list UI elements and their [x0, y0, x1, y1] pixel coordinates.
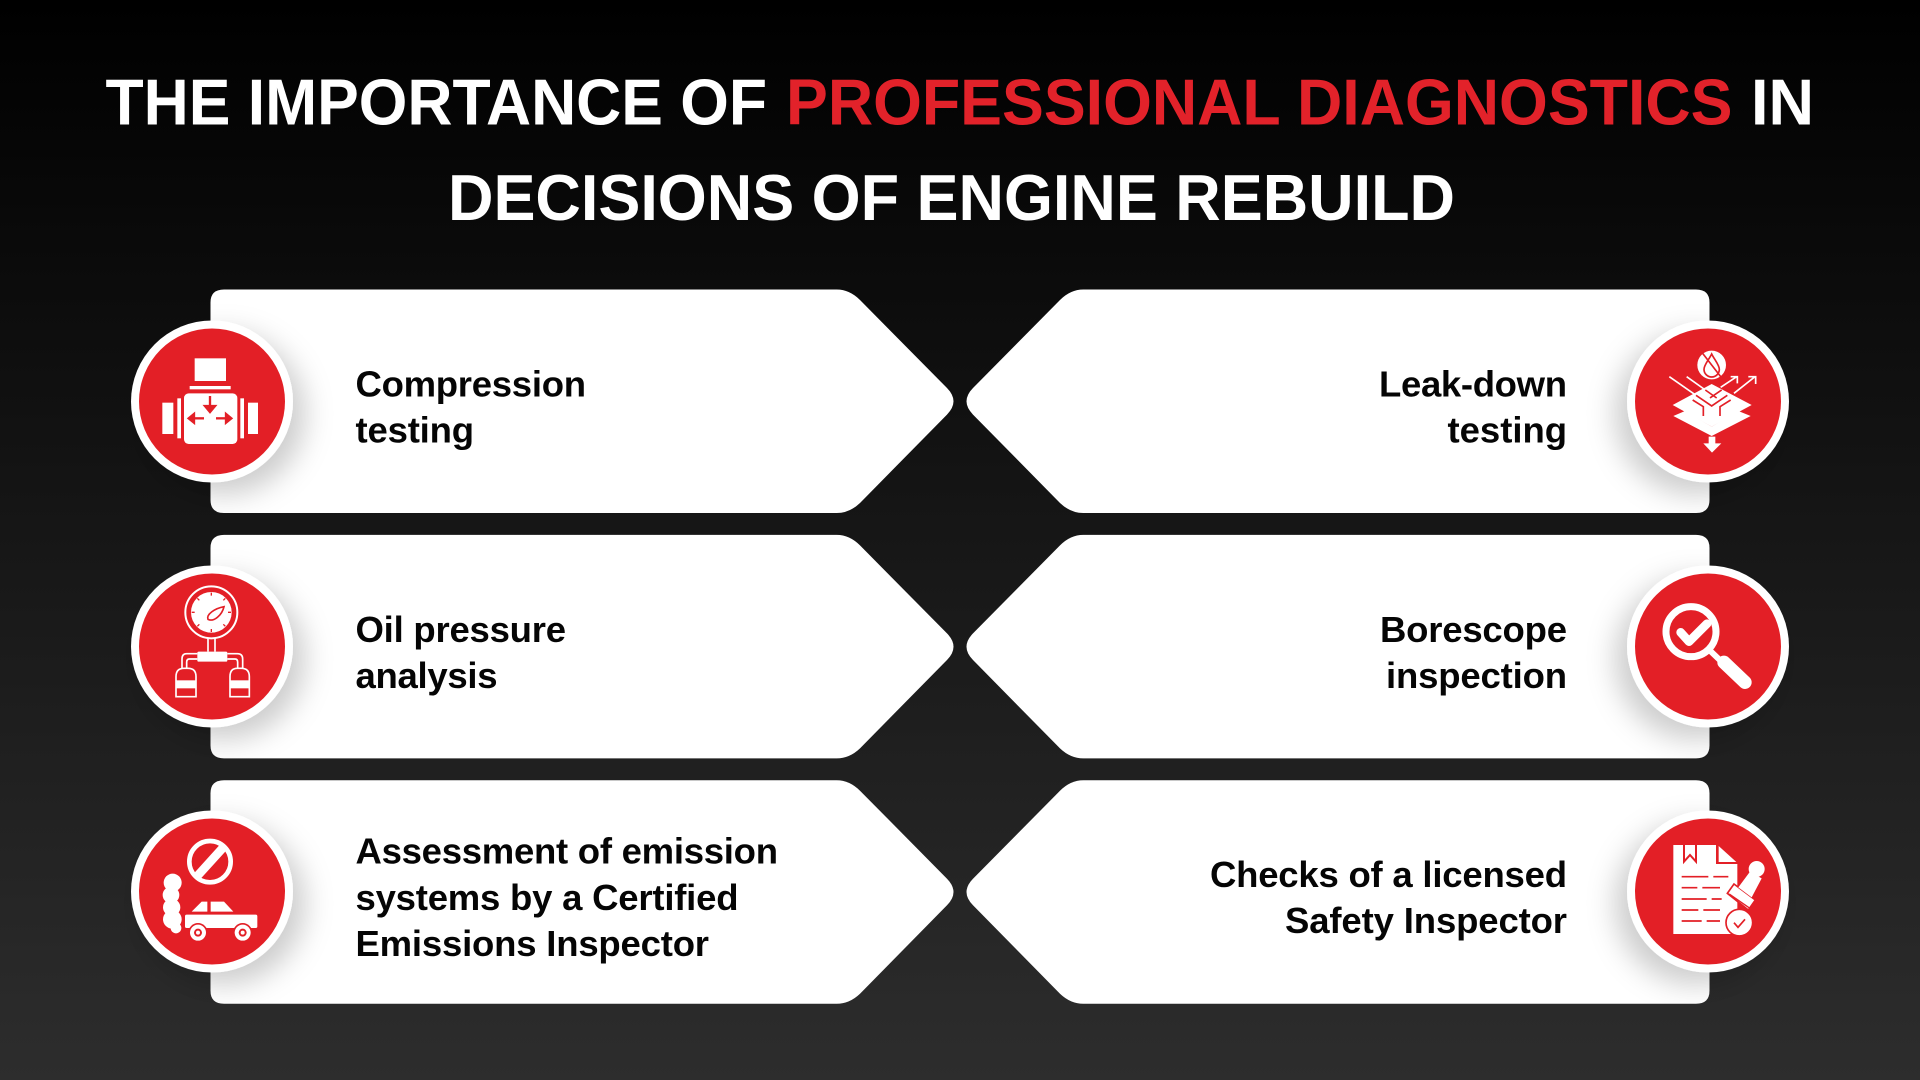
label: [1379, 364, 1567, 450]
card shape: [966, 290, 1710, 513]
title: THE IMPORTANCE OF: [106, 66, 767, 138]
label: [1210, 854, 1567, 941]
panel: emission systems assessment: [131, 780, 954, 1004]
card shape: [210, 780, 954, 1004]
icon: compression test: [131, 320, 293, 482]
card shape: [966, 535, 1710, 758]
icon: leak layers: [1627, 320, 1789, 482]
label: Safety Inspector: [1285, 900, 1567, 941]
title: DECISIONS OF ENGINE REBUILD: [448, 161, 1455, 234]
label: analysis: [356, 655, 498, 696]
label: [356, 609, 566, 696]
label: Checks of a licensed: [1210, 854, 1567, 895]
label: [1380, 609, 1567, 696]
icon: magnifier with check: [1627, 566, 1789, 728]
icon: pressure gauge: [131, 566, 293, 728]
title: [106, 66, 1814, 234]
panel: compression testing: [131, 290, 954, 513]
panel: borescope inspection: [966, 535, 1789, 758]
label: inspection: [1386, 655, 1567, 696]
label: Oil pressure: [356, 609, 566, 650]
label: Leak-down: [1379, 364, 1567, 404]
title: PROFESSIONAL DIAGNOSTICS: [786, 66, 1732, 138]
label: [356, 364, 586, 450]
panel: licensed safety inspector checks: [966, 780, 1789, 1004]
panel: leak-down testing: [966, 290, 1789, 513]
label: [356, 830, 778, 964]
label: testing: [356, 410, 474, 450]
card shape: [210, 290, 954, 513]
label: testing: [1448, 410, 1567, 450]
icon: stamped document: [1627, 810, 1789, 972]
label: Emissions Inspector: [356, 923, 709, 964]
card shape: [966, 780, 1710, 1004]
title: IN: [1751, 66, 1814, 138]
icon: car exhaust emissions: [131, 810, 293, 972]
label: systems by a Certified: [356, 877, 738, 918]
card shape: [210, 535, 954, 758]
panel: oil pressure analysis: [131, 535, 954, 758]
label: Compression: [356, 364, 586, 404]
label: Assessment of emission: [356, 830, 778, 872]
label: Borescope: [1380, 609, 1567, 650]
